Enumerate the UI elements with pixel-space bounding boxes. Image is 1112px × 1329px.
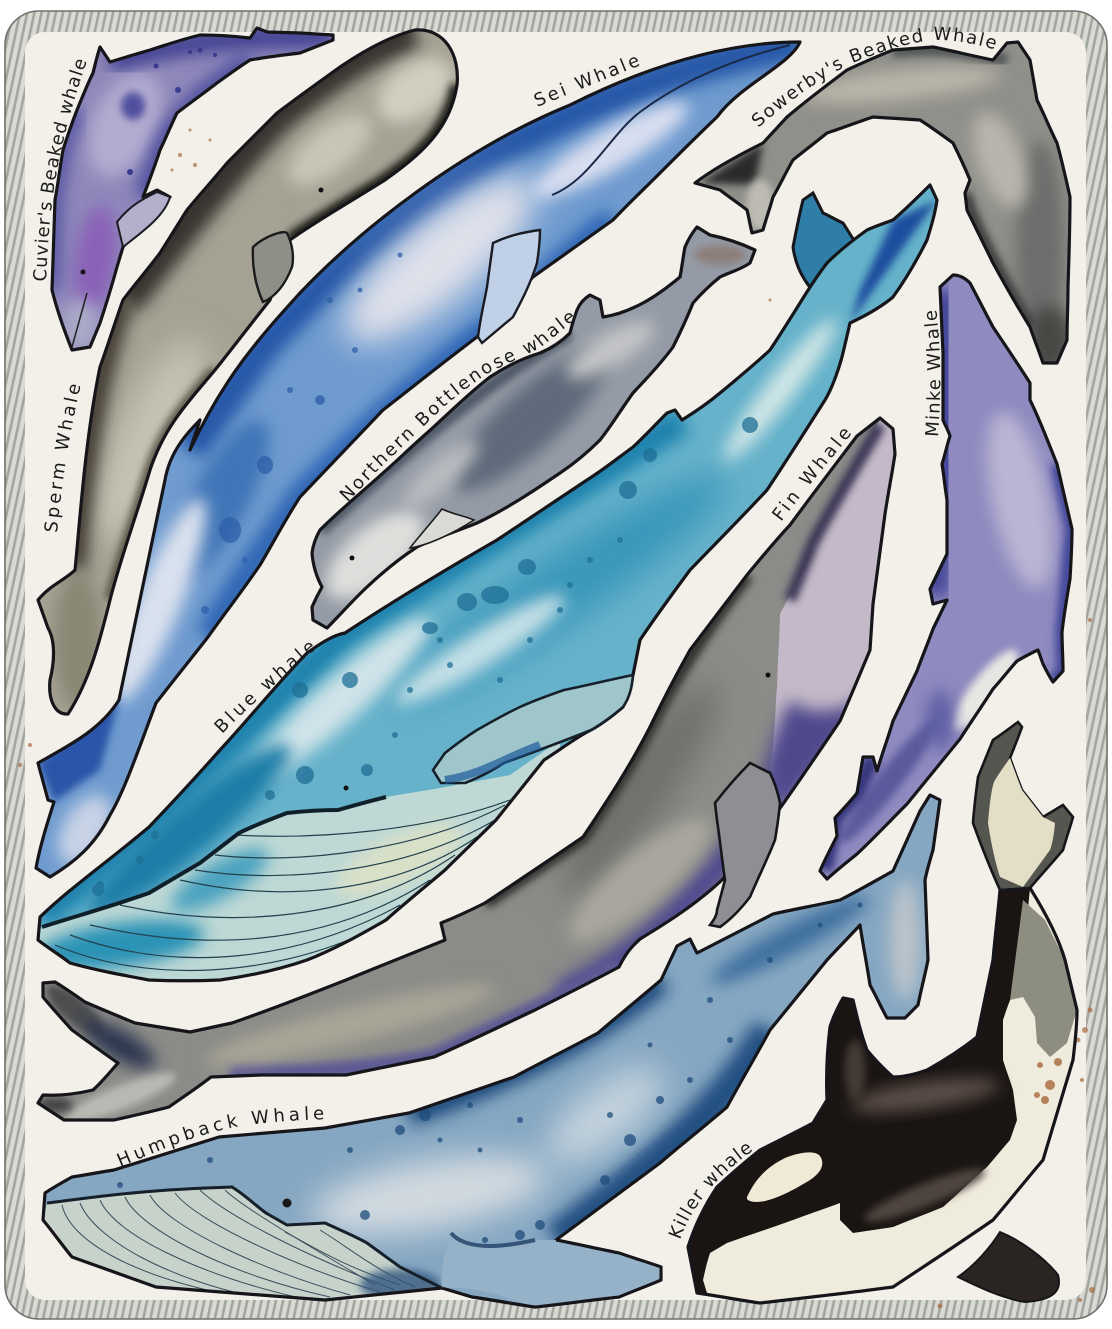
label: Cuvier's Beaked whale: Cuvier's Beaked whale (33, 60, 86, 280)
label: Humpback Whale: Humpback Whale (116, 1106, 324, 1166)
tail fluke (973, 722, 1073, 890)
flipper (410, 509, 474, 548)
mouth line (47, 1187, 442, 1288)
eye patch (747, 1152, 822, 1202)
label: Blue whale: Blue whale (214, 642, 315, 733)
flipper (117, 192, 170, 247)
throat pleats (43, 1187, 442, 1300)
whale: Cuvier's beaked whale (52, 28, 333, 351)
mouth line (552, 45, 790, 195)
label: Sei Whale: Sei Whale (534, 57, 640, 106)
rear fluke (793, 193, 855, 290)
whale: fin whale (37, 418, 895, 1132)
whale: blue whale (0, 185, 937, 1000)
whale: humpback whale (43, 795, 940, 1307)
fluke pale inner (988, 758, 1055, 887)
black back and head (688, 888, 1030, 1293)
whale: Sowerby's beaked whale (695, 42, 1072, 374)
flipper (478, 230, 540, 343)
throat pleats (40, 744, 560, 980)
whale: sperm whale (38, 30, 464, 714)
label: Minke Whale: Minke Whale (924, 310, 941, 436)
pectoral flipper (958, 1232, 1059, 1302)
label: Sowerby's Beaked Whale: Sowerby's Beaked Whale (752, 26, 996, 127)
flipper (433, 675, 633, 783)
whale: minke whale (820, 275, 1072, 879)
label: Killer whale: Killer whale (668, 1144, 752, 1238)
flipper (710, 763, 780, 927)
whale: sei whale (36, 42, 800, 877)
mouth line (42, 797, 386, 927)
label: Northern Bottlenose whale: Northern Bottlenose whale (339, 313, 573, 501)
grey rear patch (1010, 900, 1077, 1057)
flipper (253, 232, 293, 302)
whale: northern bottlenose whale (311, 227, 755, 628)
label: Sperm Whale: Sperm Whale (44, 384, 80, 532)
whale: killer whale (688, 722, 1077, 1303)
label: Fin Whale: Fin Whale (772, 429, 851, 521)
flipper (442, 1233, 661, 1307)
